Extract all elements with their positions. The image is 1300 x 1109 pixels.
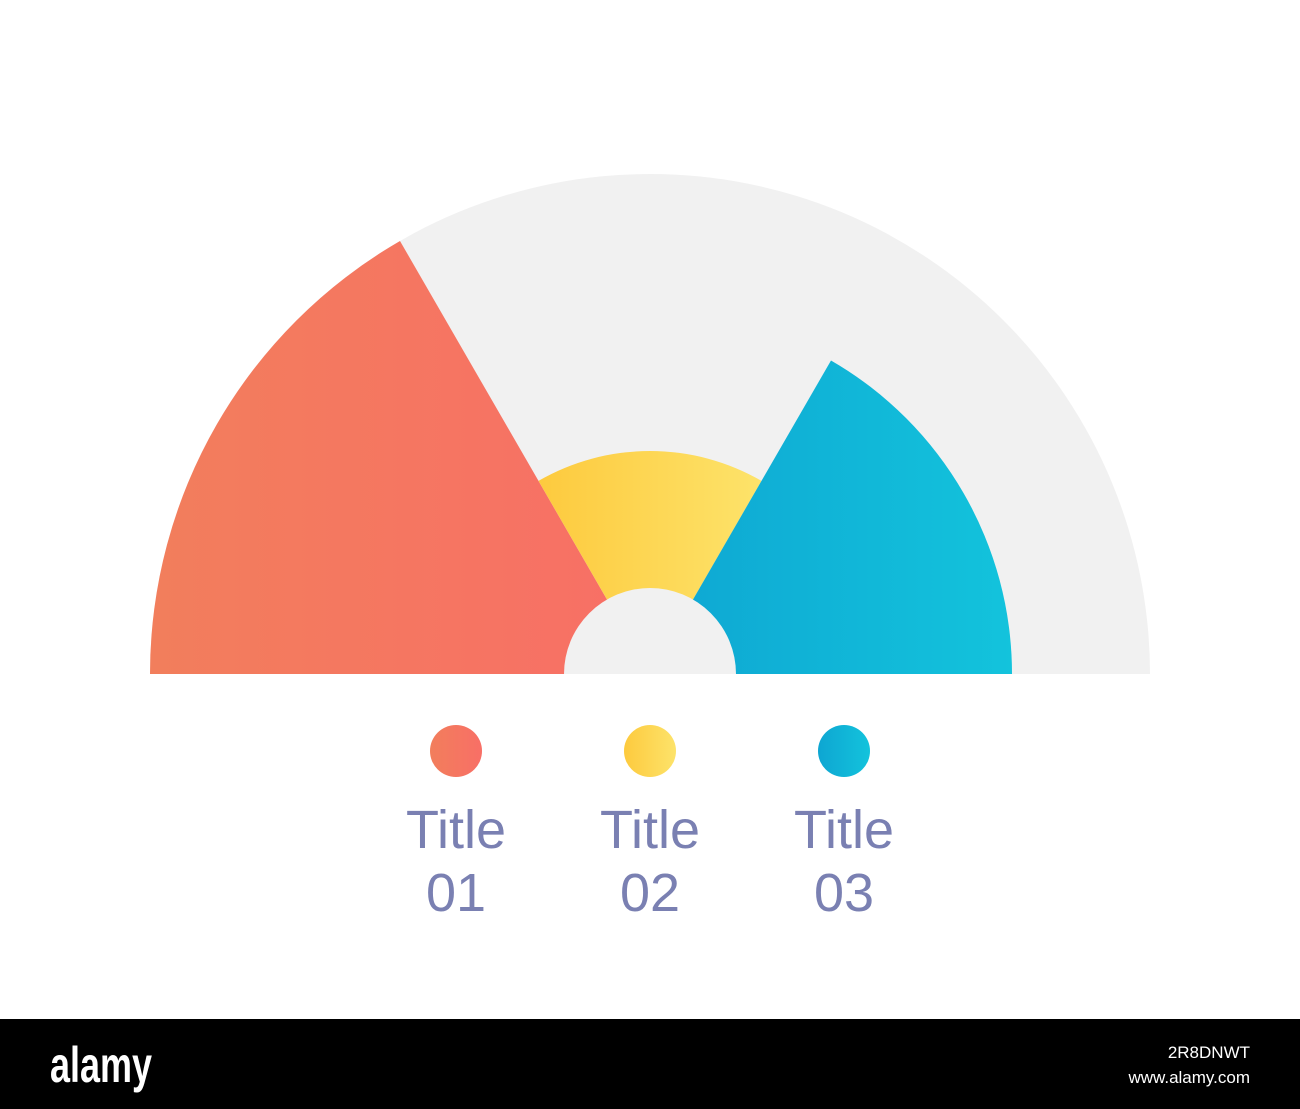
legend item 3 [794,725,894,923]
gray background semicircle [150,174,1150,674]
legend item 3: 03 [814,863,874,923]
sector: yellow [538,451,762,674]
legend item 1: Title [406,800,506,860]
legend item 2: 02 [620,863,680,923]
center hole [564,588,736,674]
legend item 2: Title [600,800,700,860]
sector: red [150,241,650,674]
legend item 2 [600,725,700,923]
footer bar: alamy [50,1037,152,1093]
legend item 3: Title [794,800,894,860]
footer bar: www.alamy.com [1127,1068,1250,1087]
legend item 1: 01 [426,863,486,923]
footer bar [0,1019,1300,1109]
footer bar: 2R8DNWT [1168,1043,1250,1062]
sector: blue [650,360,1012,674]
legend item 1 [406,725,506,923]
